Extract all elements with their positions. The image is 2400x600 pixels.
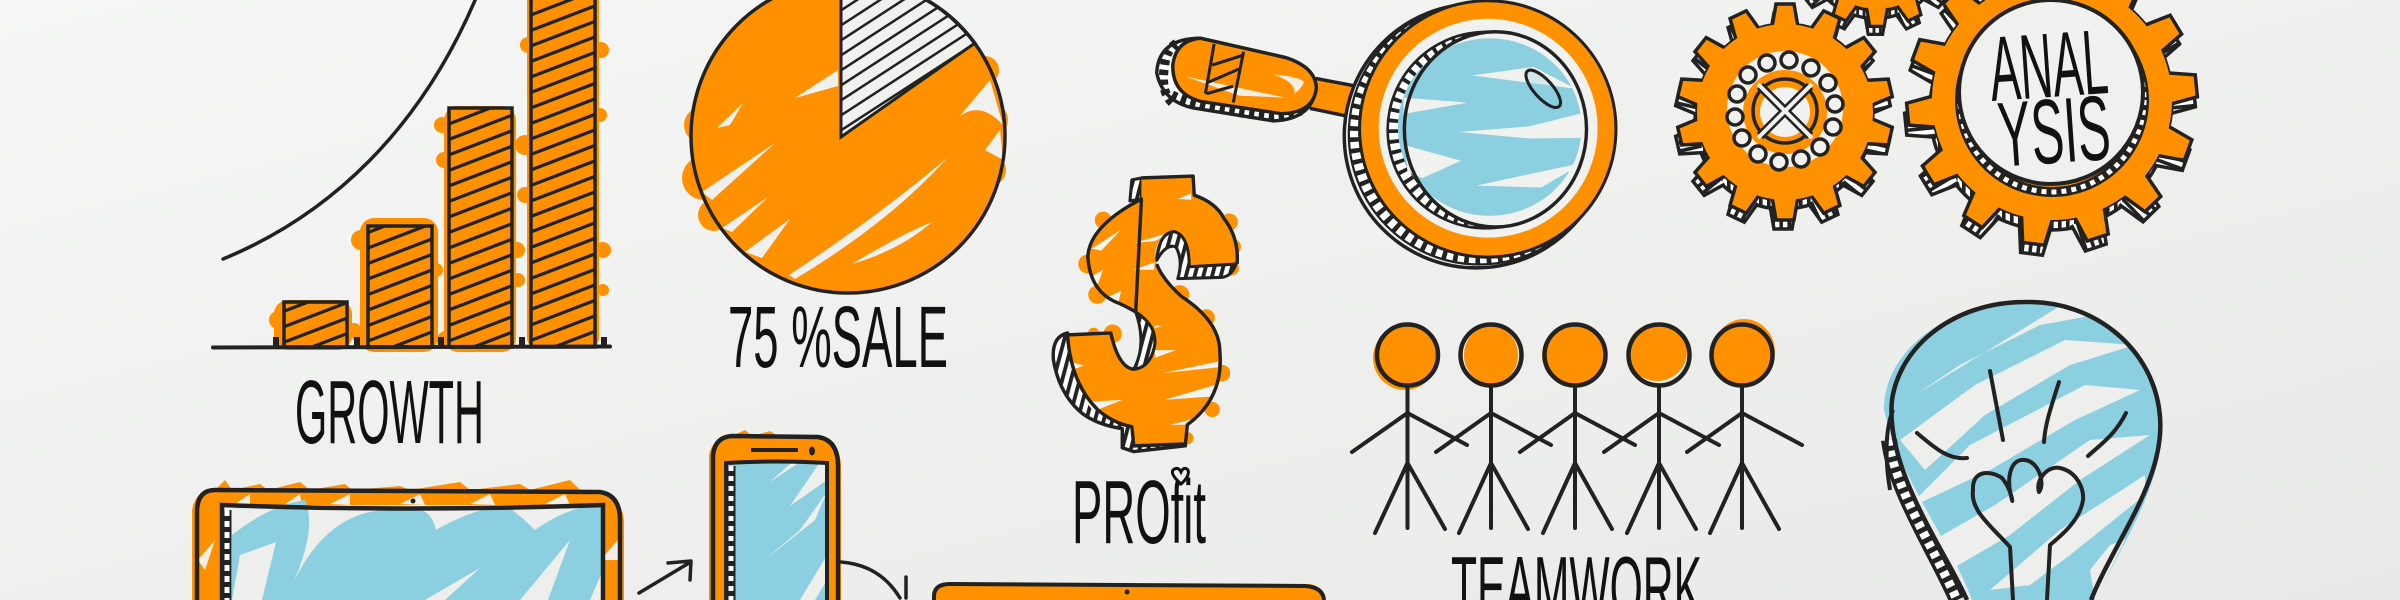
inner lens rim	[1386, 31, 1585, 230]
glass highlight	[1521, 65, 1566, 113]
top gear	[1789, 0, 1964, 34]
glass front outline	[1404, 32, 1586, 227]
panel: tablet	[192, 480, 624, 600]
left gear	[1675, 4, 1893, 229]
bar outlines	[284, 0, 595, 347]
panel: bottom device	[933, 583, 1325, 600]
head fills	[1373, 319, 1775, 390]
phone speaker and camera	[751, 448, 798, 452]
right gear window	[1959, 0, 2144, 192]
label: ANALYSIS: YSIS	[1995, 77, 2114, 187]
left gear hub with cross	[1753, 79, 1817, 143]
glass disc	[1404, 32, 1586, 227]
magnifier rim depth	[1344, 4, 1608, 268]
bulb glass outline and hatched edge	[1889, 440, 1957, 600]
phone outline	[713, 436, 838, 600]
head outlines	[1377, 324, 1772, 386]
bulb streaks	[1900, 306, 2150, 600]
phone screen streaks	[762, 462, 827, 600]
orange ring	[1360, 1, 1616, 257]
hatched 25% wedge	[841, 0, 975, 137]
heading: 75 %SALE: 75 %SALE	[728, 289, 948, 386]
dollar streaks	[1069, 193, 1218, 425]
pie streaks	[702, 70, 1003, 279]
tablet screen streaks	[232, 540, 603, 600]
phone orange frame	[709, 430, 841, 600]
blue glass scribble	[1398, 38, 1582, 216]
bulb rays	[1917, 371, 2126, 458]
magnifier handle	[1157, 38, 1356, 121]
orange pie scribble	[682, 0, 1008, 293]
bulb filament	[1973, 460, 2083, 600]
dollar depth hatching	[1053, 178, 1185, 452]
bottom device camera	[1124, 590, 1130, 594]
panel: teamwork figures	[1352, 319, 1802, 533]
panel: pie chart	[682, 0, 1008, 293]
text: GROWTH	[295, 363, 484, 463]
icon: heart on i	[1172, 468, 1188, 484]
tablet top scribble streaks	[198, 494, 618, 570]
label: ANALYSIS: ANAL	[1986, 11, 2111, 121]
dollar orange blobs	[1078, 212, 1241, 444]
arrow: phone to bottom device	[841, 562, 906, 598]
label: ANALYSIS	[1986, 11, 2116, 187]
tablet outline	[197, 490, 620, 600]
panel: gears	[1675, 0, 2198, 256]
right gear	[1904, 0, 2198, 256]
heading: PROfit: PROfit	[1072, 463, 1206, 563]
tablet screen	[222, 505, 603, 600]
orange bar scribble	[269, 0, 611, 352]
panel: dollar sign	[1053, 176, 1241, 452]
bar stripes	[284, 0, 595, 347]
panel: magnifier	[1157, 1, 1616, 268]
dollar inner hatching	[1157, 232, 1236, 279]
bottom device frame	[933, 583, 1325, 600]
blue bulb scribble	[1884, 302, 2162, 600]
panel: phone	[709, 430, 841, 600]
dollar orange body	[1068, 176, 1237, 446]
arrow: tablet to phone	[639, 561, 691, 593]
phone blue screen	[728, 462, 828, 600]
left gear bearing circles	[1727, 52, 1843, 170]
pie outline	[691, 0, 1005, 293]
axis with ticks	[213, 337, 610, 348]
dollar outline	[1068, 176, 1237, 446]
panel: growth chart	[213, 0, 611, 352]
stick bodies	[1352, 386, 1802, 533]
tablet blue scribble	[232, 500, 603, 600]
tablet orange frame	[192, 480, 624, 600]
panel: light bulb	[1884, 302, 2162, 600]
tablet camera	[410, 498, 416, 504]
growth curve	[223, 0, 476, 259]
bottom device outline	[934, 584, 1324, 600]
